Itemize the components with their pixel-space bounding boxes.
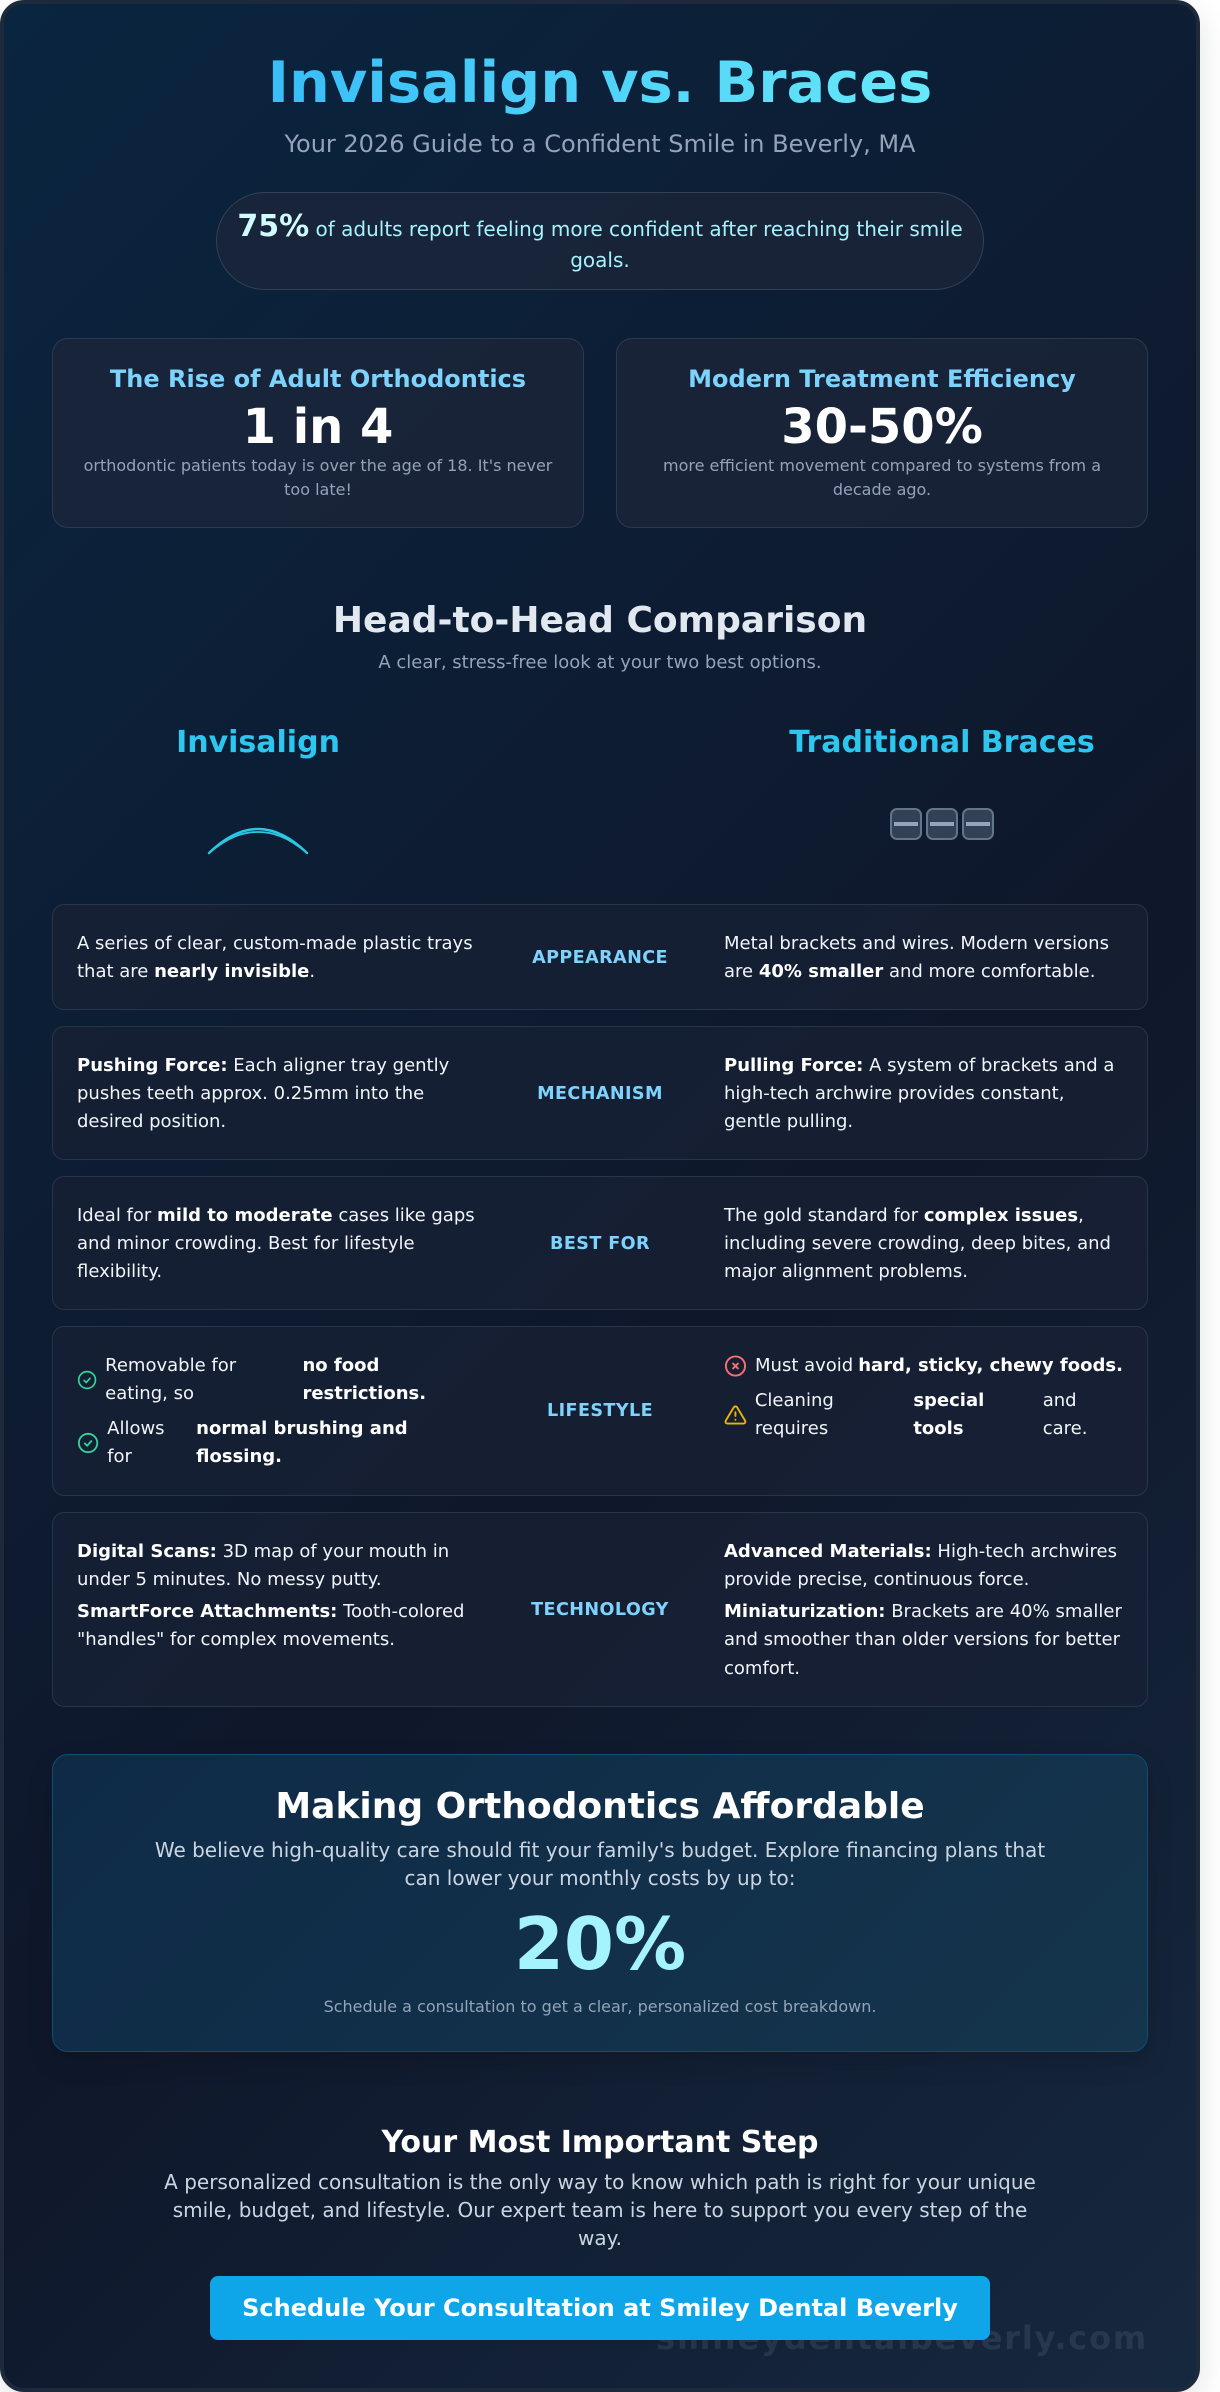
comparison row: technology: Miniaturization: Brackets are 40% smaller and smoother than older versions for better comfort. (724, 1601, 1122, 1679)
stat description: orthodontic patients today is over the age of 18. It's never too late! (84, 456, 552, 499)
panel: affordability (52, 1754, 1148, 2052)
comparison row: mechanism: Pushing Force: Each aligner tray gently pushes teeth approx. 0.25mm into the desired position. (77, 1055, 449, 1132)
call-to-action button (210, 2276, 990, 2340)
comparison row: best for: The gold standard for complex issues, including severe crowding, deep bites, and major alignment problems. (724, 1205, 1111, 1282)
callout: 75% of adults (216, 192, 984, 290)
comparison row: lifestyle: normal brushing and flossing. (196, 1418, 408, 1467)
affordability text: We believe high-quality care should fit your family's budget. Explore financing plans that can lower your monthly costs by up to: (155, 1838, 1045, 1890)
comparison row: best for (52, 1176, 1148, 1310)
comparison row: technology: SmartForce Attachments: Tooth-colored "handles" for complex movements. (77, 1601, 464, 1650)
panel: treatment efficiency stat (616, 338, 1148, 528)
icon: metal brackets (890, 808, 994, 840)
stat number: 1 in 4 (243, 399, 393, 455)
comparison heading: Head-to-Head Comparison (333, 600, 867, 641)
comparison row: technology: Advanced Materials: High-tech archwires provide precise, continuous force. (724, 1541, 1117, 1590)
row label: MECHANISM (537, 1084, 663, 1104)
subtitle: Your 2026 Guide to a Confident Smile in Beverly, MA (285, 130, 915, 158)
stat heading: Modern Treatment Efficiency (688, 365, 1076, 393)
comparison subheading: A clear, stress-free look at your two best options. (378, 652, 822, 673)
comparison row: lifestyle: special tools (913, 1390, 984, 1439)
row label: TECHNOLOGY (531, 1600, 669, 1620)
comparison row: technology (52, 1512, 1148, 1707)
stat number: 30-50% (781, 399, 983, 455)
row label: LIFESTYLE (547, 1401, 653, 1421)
comparison row: appearance (52, 904, 1148, 1010)
comparison row: lifestyle: Must avoid (755, 1355, 853, 1376)
panel: adult orthodontics stat (52, 338, 584, 528)
stat description: more efficient movement compared to systems from a decade ago. (663, 456, 1101, 499)
watermark: smileydentalbeverly.com (656, 2319, 1148, 2357)
comparison row: lifestyle: no food restrictions. (302, 1355, 426, 1404)
comparison row: lifestyle: hard, sticky, chewy foods. (858, 1355, 1123, 1376)
icon: clear aligner arch (208, 828, 308, 854)
closing heading: Your Most Important Step (381, 2125, 819, 2160)
comparison row: best for: Ideal for mild to moderate cases like gaps and minor crowding. Best for lifestyle flexibility. (77, 1205, 475, 1282)
consultation note: Schedule a consultation to get a clear, personalized cost breakdown. (324, 1997, 876, 2016)
comparison row: mechanism: Pulling Force: A system of brackets and a high-tech archwire provides constant, gentle pulling. (724, 1055, 1114, 1132)
column heading: Invisalign: Invisalign (176, 725, 340, 760)
comparison row: technology: Digital Scans: 3D map of your mouth in under 5 minutes. No messy putty. (77, 1541, 449, 1590)
comparison row: mechanism (52, 1026, 1148, 1160)
row label: APPEARANCE (532, 948, 668, 968)
closing text: A personalized consultation is the only way to know which path is right for your unique smile, budget, and lifestyle. Our expert team is here to support you every step of the way. (164, 2170, 1036, 2250)
call-to-action button: Schedule Your Consultation at Smiley Dental Beverly (242, 2294, 958, 2322)
title: Invisalign vs. Braces (268, 49, 932, 116)
callout: 75% of adults: 75% of adults report feeling more confident after reaching their smile goals. (237, 209, 963, 272)
comparison row: appearance: Metal brackets and wires. Modern versions are 40% smaller and more comfortable. (724, 933, 1109, 982)
comparison row: lifestyle: Allows for (107, 1418, 165, 1467)
comparison row: lifestyle (52, 1326, 1148, 1496)
stat heading: The Rise of Adult Orthodontics (110, 365, 526, 393)
20% savings figure: 20% (514, 1902, 686, 1986)
column heading: Traditional Braces: Traditional Braces (789, 725, 1095, 760)
affordability heading: Making Orthodontics Affordable (275, 1786, 925, 1827)
comparison row: appearance: A series of clear, custom-made plastic trays that are nearly invisible. (77, 933, 473, 982)
comparison row: lifestyle: Removable for eating, so (105, 1355, 236, 1404)
comparison row: lifestyle: Cleaning requires and care. (755, 1390, 1087, 1439)
row label: BEST FOR (550, 1234, 650, 1254)
